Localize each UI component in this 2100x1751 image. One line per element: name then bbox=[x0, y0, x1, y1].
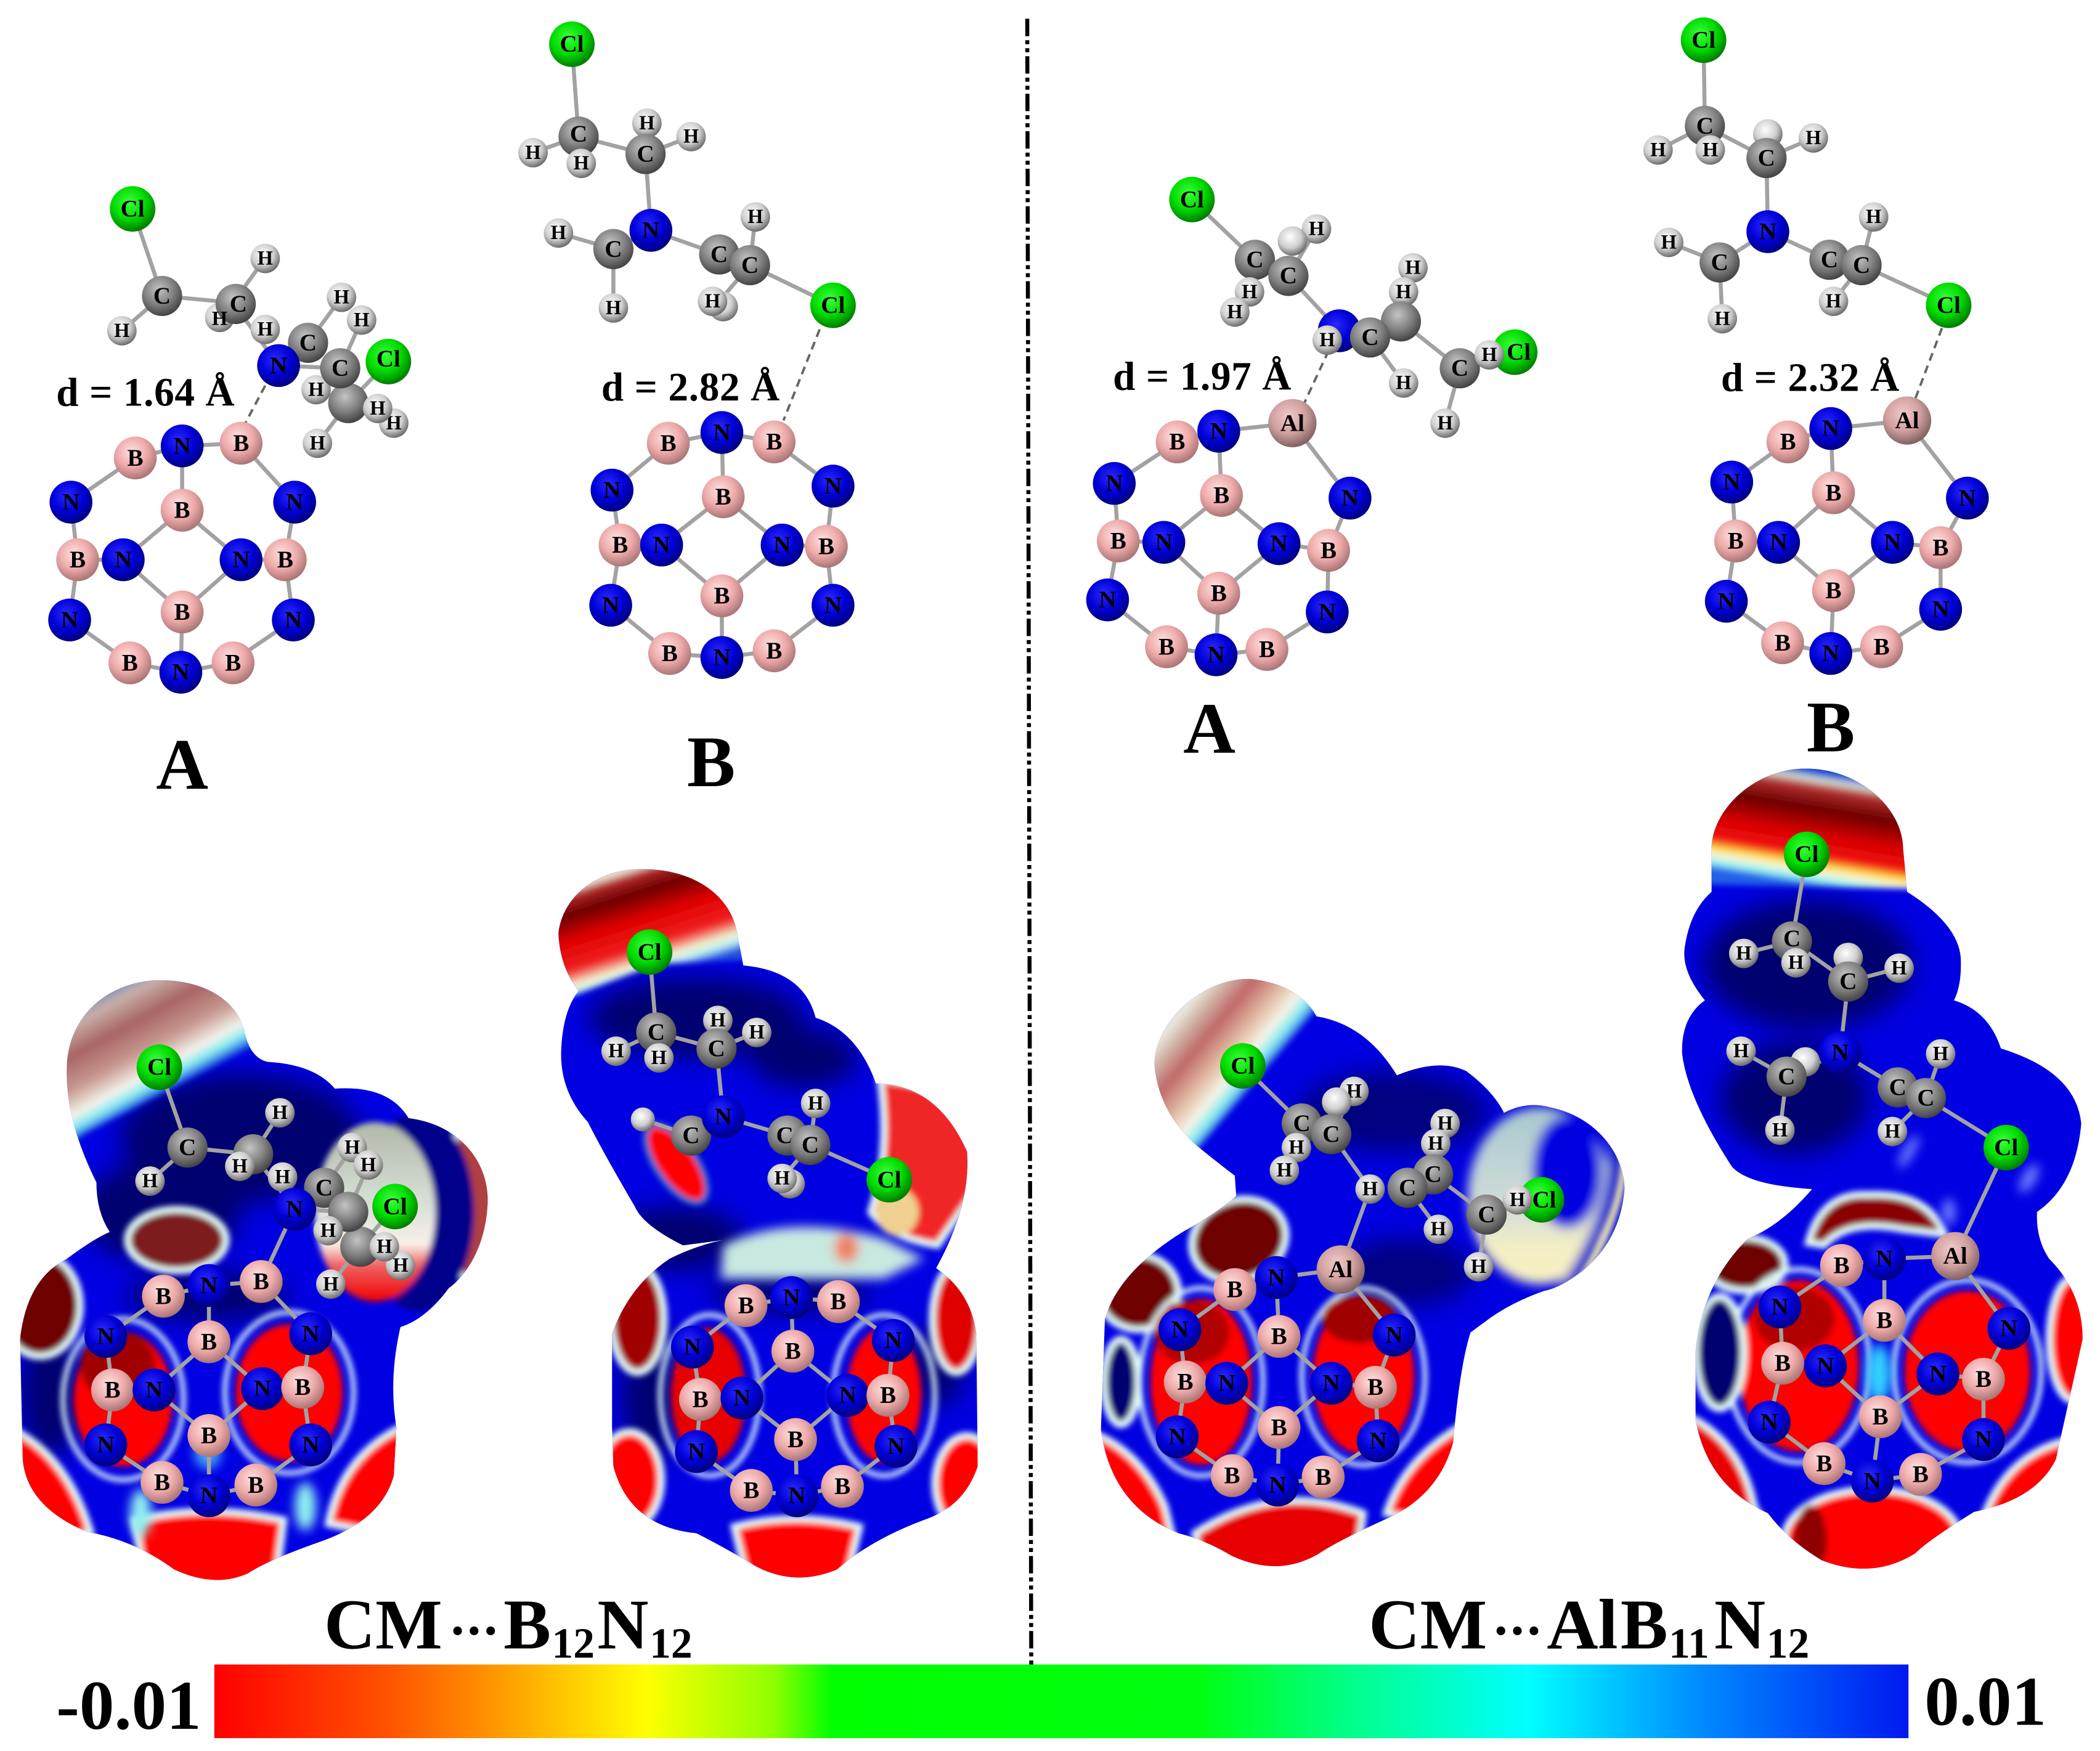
heading: CM...B12N12: N bbox=[597, 1585, 649, 1664]
ESP atoms: AlB11N12 A: Cl bbox=[1231, 1053, 1255, 1079]
panel: CM on AlB11N12 geometry A: B bbox=[1259, 636, 1275, 663]
ESP atoms: B12N12 B: H bbox=[651, 1047, 667, 1069]
panel: CM on B12N12 geometry B: N bbox=[713, 420, 731, 446]
panel: CM on AlB11N12 geometry A bbox=[1086, 177, 1537, 676]
ESP atoms: B12N12 B: C bbox=[802, 1132, 819, 1158]
panel: CM on B12N12 geometry A: H bbox=[386, 412, 402, 434]
ESP atoms: B12N12 B bbox=[601, 929, 918, 1517]
ESP atoms: AlB11N12 B: H bbox=[1891, 957, 1907, 979]
ESP atoms: AlB11N12 A: C bbox=[1424, 1161, 1442, 1188]
panel: CM on B12N12 geometry A: H bbox=[354, 309, 370, 331]
panel: CM on B12N12 geometry B: N bbox=[824, 592, 842, 619]
ESP atoms: B12N12 A: N bbox=[97, 1432, 115, 1458]
ESP atoms: AlB11N12 B: B bbox=[1876, 1307, 1892, 1334]
panel: CM on AlB11N12 geometry B: C bbox=[1821, 246, 1838, 273]
panel: CM on AlB11N12 geometry B: N bbox=[1759, 219, 1776, 245]
panel: CM on AlB11N12 geometry B: Cl bbox=[1937, 292, 1961, 319]
ESP atoms: AlB11N12 B: B bbox=[1833, 1252, 1850, 1278]
ESP atoms: AlB11N12 B: N bbox=[1771, 1294, 1789, 1320]
ESP atoms: AlB11N12 A: H bbox=[1471, 1256, 1486, 1278]
panel: CM on B12N12 geometry A: B bbox=[127, 445, 144, 471]
panel: CM on AlB11N12 geometry B bbox=[1643, 17, 1989, 675]
panel: CM on AlB11N12 geometry B: H bbox=[1826, 290, 1841, 312]
ESP atoms: AlB11N12 B: C bbox=[1783, 925, 1801, 952]
ESP atoms: AlB11N12 A: H bbox=[1277, 1160, 1292, 1182]
panel: CM on AlB11N12 geometry B: Al bbox=[1895, 407, 1919, 434]
panel: CM on AlB11N12 geometry B: B bbox=[1932, 534, 1948, 561]
ESP atoms: AlB11N12 A: N bbox=[1218, 1370, 1235, 1397]
panel: CM on AlB11N12 geometry B: B bbox=[1728, 528, 1744, 555]
panel: CM on AlB11N12 geometry A: N bbox=[1207, 641, 1225, 668]
panel: CM on AlB11N12 geometry A: Al bbox=[1280, 410, 1304, 436]
heading: CM...B12N12: 12 bbox=[551, 1620, 595, 1668]
panel: CM on AlB11N12 geometry A: N bbox=[1210, 418, 1227, 444]
ESP atoms: B12N12 B: Cl bbox=[638, 939, 662, 965]
ESP atoms: AlB11N12 A: H bbox=[1362, 1178, 1378, 1200]
panel: CM on B12N12 geometry B: N bbox=[773, 532, 791, 558]
panel: CM on B12N12 geometry B: N bbox=[824, 473, 842, 499]
heading: CM...AlB11N12: N bbox=[1714, 1585, 1765, 1664]
panel: CM on AlB11N12 geometry A: C bbox=[1361, 324, 1379, 351]
ESP atoms: B12N12 B: Cl bbox=[877, 1166, 901, 1193]
panel: CM on B12N12 geometry B: N bbox=[653, 532, 670, 558]
ESP atoms: B12N12 A: H bbox=[272, 1102, 288, 1124]
ESP atoms: AlB11N12 A: Cl bbox=[1532, 1187, 1557, 1213]
heading: CM...AlB11N12: ··· bbox=[1492, 1601, 1542, 1660]
panel: CM on B12N12 geometry A: N bbox=[62, 489, 79, 516]
ESP atoms: AlB11N12 B: H bbox=[1788, 952, 1804, 974]
ESP atoms: AlB11N12 B: B bbox=[1775, 1350, 1791, 1376]
ESP atoms: AlB11N12 A: H bbox=[1510, 1188, 1525, 1211]
panel: CM on AlB11N12 geometry B: B bbox=[1825, 479, 1842, 506]
ESP atoms: B12N12 A: N bbox=[302, 1320, 319, 1347]
ESP atoms: AlB11N12 B: N bbox=[1863, 1468, 1881, 1494]
ESP atoms: AlB11N12 B: N bbox=[2000, 1315, 2017, 1342]
ESP atoms: B12N12 A: B bbox=[201, 1328, 217, 1355]
panel: CM on B12N12 geometry B: B bbox=[766, 638, 782, 664]
divider: dash-dot vertical line bbox=[1027, 18, 1032, 1665]
ESP atoms: B12N12 A: B bbox=[155, 1283, 171, 1309]
panel: CM on AlB11N12 geometry A: B bbox=[1158, 633, 1174, 660]
panel: CM on B12N12 geometry A: H bbox=[258, 247, 273, 269]
ESP atoms: AlB11N12 B: B bbox=[1872, 1404, 1889, 1430]
ESP atoms: B12N12 A: B bbox=[105, 1377, 121, 1404]
panel: CM on B12N12 geometry B: H bbox=[683, 126, 699, 148]
ESP atoms: AlB11N12 A: C bbox=[1293, 1110, 1311, 1137]
ESP atoms: AlB11N12 A: Al bbox=[1329, 1256, 1353, 1283]
ESP atoms: B12N12 A: N bbox=[200, 1272, 218, 1299]
panel: CM on B12N12 geometry A: C bbox=[299, 330, 317, 356]
ESP atoms: B12N12 B: B bbox=[743, 1477, 759, 1504]
panel: CM on AlB11N12 geometry A: C bbox=[1246, 246, 1264, 273]
ESP atoms: AlB11N12 A: N bbox=[1322, 1370, 1340, 1397]
ESP atoms: AlB11N12 A: B bbox=[1367, 1374, 1383, 1400]
panel: CM on AlB11N12 geometry B: H bbox=[1650, 139, 1666, 161]
ESP atoms: AlB11N12 A: B bbox=[1271, 1414, 1287, 1440]
panel: CM on B12N12 geometry A: Cl bbox=[121, 196, 145, 222]
label A: A bbox=[1183, 688, 1235, 768]
panel: CM on B12N12 geometry B: B bbox=[818, 533, 834, 559]
distance label d = 2.82: d = 2.82 Å bbox=[601, 365, 780, 410]
ESP atoms: AlB11N12 B: B bbox=[1913, 1461, 1929, 1487]
ESP atoms: B12N12 B: C bbox=[708, 1035, 725, 1062]
ESP atoms: B12N12 B: N bbox=[684, 1334, 701, 1360]
ESP atoms: B12N12 B: H bbox=[775, 1168, 790, 1190]
panel: CM on AlB11N12 geometry B: N bbox=[1932, 596, 1949, 622]
heading: CM...B12N12: CM bbox=[324, 1585, 442, 1664]
panel: CM on AlB11N12 geometry A: B bbox=[1213, 482, 1229, 509]
ESP atoms: B12N12 B: N bbox=[733, 1385, 751, 1412]
panel: CM on AlB11N12 geometry A: H bbox=[1309, 218, 1324, 240]
panel: CM on B12N12 geometry A: C bbox=[230, 291, 247, 317]
panel: CM on B12N12 geometry B: H bbox=[639, 112, 654, 134]
panel: CM on AlB11N12 geometry A: N bbox=[1271, 530, 1288, 557]
ESP atoms: B12N12 A: H bbox=[320, 1219, 336, 1241]
panel: CM on B12N12 geometry B: C bbox=[570, 121, 587, 147]
panel: CM on B12N12 geometry B: C bbox=[637, 140, 654, 167]
ESP atoms: AlB11N12 B: B bbox=[1816, 1450, 1832, 1477]
panel: CM on AlB11N12 geometry B: B bbox=[1874, 633, 1890, 660]
panel: CM on AlB11N12 geometry A: H bbox=[1481, 344, 1497, 366]
panel: CM on B12N12 geometry B: N bbox=[642, 217, 659, 243]
label B: B bbox=[687, 722, 735, 802]
ESP atoms: B12N12 A: N bbox=[286, 1196, 303, 1222]
ESP atoms: AlB11N12 A: B bbox=[1177, 1368, 1194, 1395]
label B: B bbox=[1807, 687, 1855, 767]
panel: CM on B12N12 geometry A: H bbox=[334, 286, 349, 309]
ESP atoms: B12N12 A: B bbox=[295, 1374, 311, 1400]
panel: CM on AlB11N12 geometry A: B bbox=[1321, 537, 1337, 564]
panel: CM on AlB11N12 geometry B: N bbox=[1959, 485, 1976, 511]
ESP atoms: B12N12 B: C bbox=[648, 1019, 665, 1046]
ESP atoms: B12N12 A: C bbox=[315, 1174, 333, 1201]
ESP atoms: B12N12 A: B bbox=[154, 1469, 170, 1496]
panel: CM on AlB11N12 geometry A: N bbox=[1105, 470, 1123, 497]
ESP atoms: AlB11N12 A: H bbox=[1346, 1080, 1362, 1102]
panel: CM on B12N12 geometry A: N bbox=[270, 352, 287, 379]
panel: CM on AlB11N12 geometry B: C bbox=[1758, 145, 1775, 171]
heading: CM...B12N12: ··· bbox=[449, 1601, 499, 1660]
ESP atoms: B12N12 B: B bbox=[693, 1386, 709, 1413]
panel: CM on B12N12 geometry B: N bbox=[602, 592, 619, 619]
ESP atoms: B12N12 A: N bbox=[200, 1482, 218, 1509]
panel: CM on AlB11N12 geometry B: Cl bbox=[1691, 27, 1715, 54]
panel: CM on B12N12 geometry B: C bbox=[741, 252, 759, 278]
ESP atoms: B12N12 B: B bbox=[738, 1293, 754, 1319]
ESP atoms: AlB11N12 A bbox=[1156, 1043, 1565, 1506]
panel: CM on B12N12 geometry A: C bbox=[153, 283, 171, 309]
ESP atoms: AlB11N12 B: N bbox=[1831, 1039, 1849, 1066]
ESP atoms: B12N12 A: H bbox=[393, 1254, 409, 1277]
panel: CM on B12N12 geometry B: B bbox=[766, 429, 782, 455]
panel: CM on B12N12 geometry A: N bbox=[172, 659, 190, 686]
ESP atoms: AlB11N12 A: H bbox=[1288, 1137, 1304, 1159]
ESP atoms: B12N12 A: Cl bbox=[147, 1054, 171, 1081]
colour scale bar bbox=[214, 1665, 1908, 1738]
heading: CM...AlB11N12: Al bbox=[1547, 1585, 1618, 1664]
panel: CM on B12N12 geometry A: B bbox=[70, 546, 86, 573]
panel: CM on B12N12 geometry B: H bbox=[705, 290, 720, 312]
ESP atoms: AlB11N12 B: N bbox=[1929, 1360, 1947, 1387]
distance label d = 1.97: d = 1.97 Å bbox=[1113, 354, 1292, 399]
panel: CM on AlB11N12 geometry A: H bbox=[1227, 301, 1243, 323]
ESP atoms: AlB11N12 B: N bbox=[1760, 1409, 1778, 1436]
panel: CM on B12N12 geometry A: H bbox=[370, 397, 386, 420]
ESP atoms: AlB11N12 A: N bbox=[1268, 1264, 1285, 1291]
panel: CM on B12N12 geometry A: N bbox=[285, 607, 302, 633]
panel: CM on AlB11N12 geometry B: B bbox=[1780, 429, 1796, 455]
panel: CM on B12N12 geometry B: B bbox=[715, 484, 731, 510]
panel: CM on B12N12 geometry B: B bbox=[661, 430, 677, 457]
ESP atoms: AlB11N12 A: C bbox=[1322, 1121, 1340, 1147]
panel: CM on B12N12 geometry A: B bbox=[174, 497, 190, 524]
panel: CM on B12N12 geometry A: B bbox=[122, 649, 138, 676]
ESP atoms: B12N12 B: H bbox=[710, 1009, 726, 1031]
heading: CM...B12N12: 12 bbox=[649, 1620, 693, 1668]
ESP atoms: AlB11N12 B bbox=[1727, 832, 2030, 1503]
scale min label: -0.01 bbox=[56, 1667, 201, 1744]
panel: CM on AlB11N12 geometry B: C bbox=[1853, 252, 1870, 278]
panel: CM on B12N12 geometry A: H bbox=[258, 319, 273, 341]
ESP atoms: B12N12 B: N bbox=[887, 1433, 905, 1460]
panel: CM on AlB11N12 geometry B: N bbox=[1884, 529, 1901, 556]
ESP atoms: B12N12 A: Cl bbox=[383, 1193, 407, 1220]
ESP atoms: AlB11N12 A: C bbox=[1399, 1174, 1416, 1201]
ESP atoms: AlB11N12 B: N bbox=[1975, 1426, 1992, 1453]
distance label d = 1.64: d = 1.64 Å bbox=[56, 371, 235, 415]
scale max label: 0.01 bbox=[1924, 1663, 2046, 1740]
panel: CM on AlB11N12 geometry A: Cl bbox=[1507, 339, 1531, 365]
ESP atoms: AlB11N12 B: H bbox=[1772, 1119, 1788, 1141]
ESP atoms: AlB11N12 A: N bbox=[1369, 1428, 1387, 1454]
ESP atoms: B12N12 A: N bbox=[254, 1375, 271, 1402]
ESP atoms: B12N12 B: C bbox=[776, 1123, 794, 1149]
panel: CM on B12N12 geometry A: N bbox=[232, 546, 250, 573]
ESP atoms: B12N12 A: N bbox=[145, 1377, 163, 1404]
panel: CM on AlB11N12 geometry B: H bbox=[1661, 231, 1677, 253]
panel: CM on B12N12 geometry B: C bbox=[604, 236, 622, 262]
panel: CM on AlB11N12 geometry B: N bbox=[1822, 415, 1839, 442]
ESP atoms: B12N12 A: H bbox=[323, 1273, 339, 1295]
ESP atoms: B12N12 B: H bbox=[608, 1040, 624, 1062]
ESP atoms: AlB11N12 B: N bbox=[1876, 1246, 1893, 1272]
panel: CM on AlB11N12 geometry A: N bbox=[1341, 485, 1359, 511]
ESP atoms: AlB11N12 B: H bbox=[1733, 1040, 1749, 1062]
panel: CM on AlB11N12 geometry A: H bbox=[1396, 372, 1411, 394]
panel: CM on B12N12 geometry B: Cl bbox=[821, 292, 845, 319]
panel: CM on B12N12 geometry A: B bbox=[233, 430, 249, 457]
ESP surface: AlB11N12 A bbox=[1101, 978, 1624, 1566]
ESP atoms: B12N12 A: C bbox=[179, 1134, 196, 1161]
ESP atoms: B12N12 A: B bbox=[201, 1422, 217, 1448]
panel: CM on B12N12 geometry B: H bbox=[525, 142, 541, 164]
panel: CM on B12N12 geometry A: B bbox=[225, 649, 241, 676]
ESP atoms: AlB11N12 A: B bbox=[1315, 1464, 1331, 1490]
ESP atoms: B12N12 B: H bbox=[808, 1092, 823, 1115]
ESP atoms: B12N12 A: H bbox=[142, 1170, 158, 1192]
panel: CM on B12N12 geometry B: H bbox=[551, 222, 566, 244]
ESP atoms: B12N12 B: B bbox=[788, 1426, 804, 1453]
panel: CM on B12N12 geometry B: H bbox=[747, 206, 763, 228]
panel: CM on AlB11N12 geometry B: N bbox=[1723, 469, 1740, 495]
panel: CM on AlB11N12 geometry A: B bbox=[1169, 429, 1186, 455]
heading: CM...AlB11N12: 11 bbox=[1669, 1620, 1709, 1668]
ESP atoms: B12N12 B: B bbox=[785, 1338, 801, 1365]
ESP atoms: AlB11N12 B: H bbox=[1884, 1121, 1900, 1143]
ESP atoms: B12N12 A: H bbox=[360, 1154, 376, 1176]
panel: CM on B12N12 geometry B: H bbox=[574, 152, 589, 174]
panel: CM on AlB11N12 geometry A: H bbox=[1405, 257, 1421, 279]
panel: CM on AlB11N12 geometry A: H bbox=[1319, 329, 1335, 351]
label A: A bbox=[156, 725, 208, 805]
panel: CM on AlB11N12 geometry A: N bbox=[1099, 587, 1117, 613]
panel: CM on AlB11N12 geometry B: N bbox=[1770, 529, 1787, 556]
ESP atoms: B12N12 A: B bbox=[248, 1472, 264, 1498]
panel: CM on AlB11N12 geometry A: Cl bbox=[1180, 186, 1204, 213]
ESP atoms: AlB11N12 B: H bbox=[1933, 1043, 1948, 1065]
panel: CM on B12N12 geometry A: H bbox=[114, 320, 129, 342]
ESP atoms: AlB11N12 A: B bbox=[1271, 1323, 1287, 1350]
panel: CM on AlB11N12 geometry A: B bbox=[1211, 580, 1227, 606]
panel: CM on B12N12 geometry B: C bbox=[710, 241, 728, 267]
ESP atoms: AlB11N12 B: N bbox=[1817, 1352, 1834, 1379]
panel: CM on AlB11N12 geometry A: H bbox=[1396, 281, 1411, 303]
panel: CM on AlB11N12 geometry B: N bbox=[1717, 588, 1735, 614]
panel: CM on B12N12 geometry A: Cl bbox=[376, 346, 401, 372]
panel: CM on B12N12 geometry B: N bbox=[713, 644, 731, 671]
panel: CM on B12N12 geometry A: H bbox=[212, 307, 227, 330]
panel: CM on B12N12 geometry A: N bbox=[286, 489, 303, 516]
ESP atoms: AlB11N12 A: B bbox=[1224, 1463, 1240, 1489]
ESP atoms: B12N12 B: B bbox=[880, 1382, 896, 1408]
panel: CM on AlB11N12 geometry B: C bbox=[1711, 249, 1728, 275]
ESP atoms: AlB11N12 A: H bbox=[1431, 1218, 1446, 1240]
panel: CM on B12N12 geometry A: C bbox=[332, 355, 349, 381]
panel: CM on AlB11N12 geometry B: H bbox=[1866, 206, 1881, 228]
heading: CM...AlB11N12: 12 bbox=[1767, 1620, 1809, 1668]
ESP atoms: AlB11N12 B: Al bbox=[1943, 1243, 1968, 1269]
ESP atoms: B12N12 B: N bbox=[688, 1439, 705, 1465]
ESP atoms: B12N12 B: B bbox=[834, 1473, 850, 1500]
panel: CM on B12N12 geometry B: B bbox=[612, 532, 628, 558]
panel: CM on B12N12 geometry A: N bbox=[61, 607, 78, 633]
ESP atoms: AlB11N12 B: Cl bbox=[1994, 1134, 2019, 1161]
panel: CM on B12N12 geometry B: Cl bbox=[560, 31, 584, 57]
panel: CM on AlB11N12 geometry A: H bbox=[1437, 412, 1453, 434]
panel: CM on AlB11N12 geometry A: C bbox=[1451, 355, 1468, 381]
ESP atoms: B12N12 A: H bbox=[376, 1235, 392, 1257]
panel: CM on AlB11N12 geometry B: B bbox=[1825, 577, 1842, 604]
panel: CM on B12N12 geometry A: N bbox=[115, 546, 132, 573]
ESP atoms: B12N12 A: N bbox=[302, 1432, 319, 1458]
ESP atoms: B12N12 A: H bbox=[275, 1166, 290, 1188]
ESP atoms: B12N12 B: N bbox=[885, 1327, 902, 1354]
panel: CM on B12N12 geometry B: B bbox=[662, 640, 678, 667]
heading: CM...AlB11N12: B bbox=[1621, 1585, 1668, 1664]
panel: CM on B12N12 geometry A: B bbox=[174, 599, 190, 625]
ESP atoms: AlB11N12 A: H bbox=[1428, 1132, 1444, 1155]
panel: CM on AlB11N12 geometry B: H bbox=[1714, 307, 1730, 330]
ESP atoms: AlB11N12 B: C bbox=[1889, 1074, 1907, 1100]
panel: CM on AlB11N12 geometry A: H bbox=[1242, 281, 1258, 303]
ESP atoms: B12N12 B: N bbox=[783, 1285, 800, 1311]
ESP atoms: B12N12 B: N bbox=[715, 1103, 732, 1130]
ESP atoms: AlB11N12 A: N bbox=[1269, 1472, 1287, 1498]
panel: CM on AlB11N12 geometry B: B bbox=[1775, 630, 1791, 656]
panel: CM on AlB11N12 geometry A: N bbox=[1155, 529, 1173, 556]
ESP atoms: B12N12 A: H bbox=[344, 1137, 360, 1159]
ESP atoms: AlB11N12 A: N bbox=[1385, 1322, 1403, 1348]
ESP atoms: AlB11N12 B: C bbox=[1839, 969, 1857, 995]
ESP atoms: B12N12 B: H bbox=[749, 1022, 765, 1044]
ESP atoms: B12N12 A: N bbox=[97, 1323, 115, 1350]
panel: CM on B12N12 geometry A bbox=[48, 186, 411, 694]
panel: CM on AlB11N12 geometry B: N bbox=[1822, 640, 1839, 667]
ESP atoms: B12N12 A bbox=[84, 1044, 418, 1517]
panel: CM on B12N12 geometry B: H bbox=[606, 297, 621, 319]
panel: CM on B12N12 geometry A: N bbox=[173, 433, 191, 459]
panel: CM on AlB11N12 geometry A: B bbox=[1110, 528, 1126, 555]
ESP atoms: B12N12 A: H bbox=[232, 1155, 248, 1177]
ESP surface: B12N12 A bbox=[20, 980, 488, 1580]
ESP atoms: AlB11N12 B: H bbox=[1736, 942, 1752, 964]
ESP atoms: B12N12 B: N bbox=[788, 1482, 805, 1509]
panel: CM on B12N12 geometry A: H bbox=[308, 378, 324, 400]
panel: CM on B12N12 geometry B bbox=[518, 22, 856, 679]
ESP atoms: AlB11N12 A: H bbox=[1437, 1113, 1453, 1135]
heading: CM...B12N12: B bbox=[503, 1585, 551, 1664]
ESP atoms: B12N12 B: N bbox=[839, 1382, 857, 1408]
panel: CM on AlB11N12 geometry B: H bbox=[1805, 127, 1821, 149]
panel: CM on AlB11N12 geometry A: C bbox=[1280, 262, 1297, 289]
panel: CM on B12N12 geometry B: N bbox=[603, 477, 621, 503]
panel: CM on B12N12 geometry A: H bbox=[309, 432, 325, 454]
heading: CM...AlB11N12: CM bbox=[1369, 1585, 1487, 1664]
distance label d = 2.32: d = 2.32 Å bbox=[1721, 356, 1900, 400]
ESP atoms: AlB11N12 B: B bbox=[1976, 1366, 1992, 1392]
ESP atoms: B12N12 A: B bbox=[253, 1268, 269, 1294]
panel: CM on AlB11N12 geometry A: N bbox=[1319, 599, 1336, 625]
ESP atoms: AlB11N12 B: C bbox=[1917, 1085, 1935, 1111]
ESP atoms: B12N12 B: B bbox=[831, 1288, 847, 1315]
ESP surface: AlB11N12 B bbox=[1674, 750, 2098, 1591]
ESP surface: B12N12 B bbox=[535, 857, 999, 1593]
panel: CM on AlB11N12 geometry B: H bbox=[1703, 139, 1718, 161]
panel: CM on B12N12 geometry A: B bbox=[277, 546, 293, 573]
ESP atoms: AlB11N12 B: Cl bbox=[1794, 841, 1819, 867]
panel: CM on B12N12 geometry B: B bbox=[714, 583, 730, 609]
panel: CM on AlB11N12 geometry B: C bbox=[1696, 113, 1714, 139]
ESP atoms: B12N12 B: C bbox=[682, 1123, 700, 1149]
ESP atoms: AlB11N12 A: N bbox=[1168, 1424, 1186, 1450]
ESP atoms: AlB11N12 A: C bbox=[1478, 1201, 1496, 1228]
ESP atoms: AlB11N12 A: N bbox=[1171, 1317, 1189, 1343]
ESP atoms: AlB11N12 A: B bbox=[1227, 1277, 1243, 1303]
ESP atoms: AlB11N12 B: C bbox=[1778, 1063, 1796, 1090]
